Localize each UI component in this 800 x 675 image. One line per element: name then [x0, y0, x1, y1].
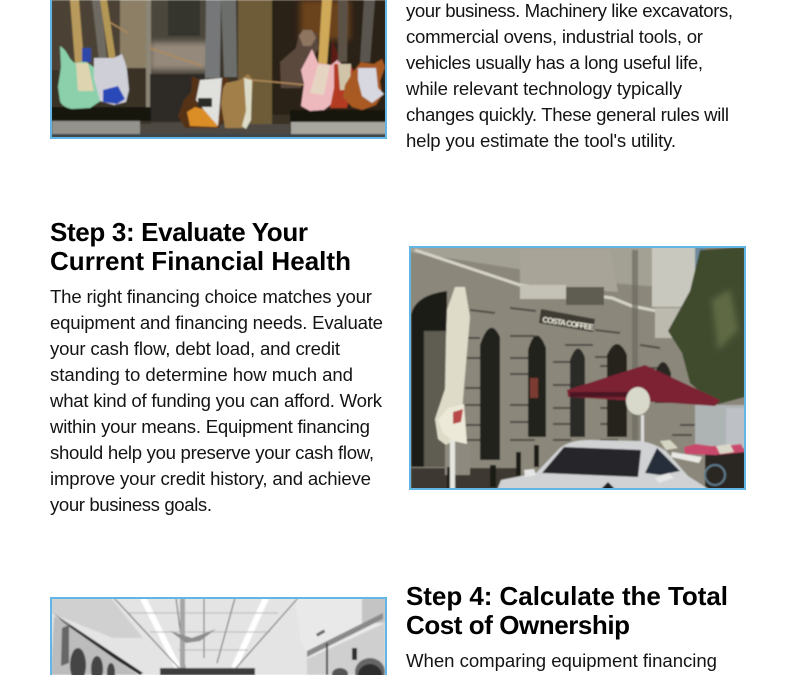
back wall [160, 668, 255, 675]
text: step 2 paragraph continuation: your business. Machinery like excavators, [406, 0, 733, 21]
text: step 4 paragraph start: When comparing equipment financing [406, 650, 717, 671]
tree [668, 247, 745, 405]
cafe photo border [410, 247, 745, 489]
flowers and bicycle [705, 452, 745, 490]
heading: step 3: Current Financial Health [50, 246, 351, 276]
text: step 2 paragraph continuation: vehicles usually has a long useful life, [406, 52, 703, 73]
photo: laundromat interior [51, 598, 386, 675]
left arch [411, 291, 447, 467]
heading: step 3: Step 3: Evaluate Your [50, 217, 308, 247]
left washers [54, 614, 134, 668]
text: step 3 paragraph: equipment and financing needs. Evaluate [50, 312, 383, 333]
right washers [307, 613, 383, 657]
guitar: white and blue [82, 0, 129, 105]
white car [497, 440, 710, 490]
text: step 2 paragraph continuation [405, 0, 733, 151]
text: step 3 paragraph: standing to determine how much and [50, 364, 353, 385]
text: step 3 paragraph [49, 286, 383, 515]
heading: step 3 [50, 217, 351, 276]
guitar photo border [51, 0, 386, 138]
guitar: mint [58, 0, 102, 109]
text: step 3 paragraph: The right financing choice matches your [50, 286, 372, 307]
arched windows [480, 328, 500, 460]
sign: Costa Coffee: COSTA COFFEE [542, 315, 595, 332]
sign backing [539, 309, 595, 332]
text: step 3 paragraph: within your means. Equipment financing [49, 416, 370, 437]
pavement [411, 468, 521, 490]
photo: cafe building with white car [410, 247, 745, 490]
heading: step 4 [406, 581, 728, 640]
text: step 3 paragraph: what kind of funding you can afford. Work [49, 390, 383, 411]
text: step 2 paragraph continuation: changes quickly. These general rules will [406, 104, 729, 125]
text: step 2 paragraph continuation: while relevant technology typically [405, 78, 683, 99]
columns [695, 405, 745, 447]
text: step 2 paragraph continuation: commercial ovens, industrial tools, or [406, 26, 703, 47]
guitar: red and cream [330, 0, 355, 108]
red parasol [567, 365, 720, 406]
heading: step 4: Cost of Ownership [406, 610, 630, 640]
text: step 3 paragraph: your business goals. [50, 494, 212, 515]
facade stone courses [465, 308, 696, 440]
guitar: sunburst bass [178, 0, 229, 128]
photo: guitars in a shop window [51, 0, 386, 138]
folded white umbrella [435, 287, 470, 445]
laundromat photo border [51, 598, 386, 675]
bollards [447, 445, 539, 488]
text: step 3 paragraph: improve your credit history, and achieve [50, 468, 371, 489]
guitar: right sunburst [343, 0, 385, 110]
guitar: pink [301, 0, 342, 111]
guitar: brown bass [221, 0, 253, 129]
ceiling lines [114, 598, 298, 675]
heading: step 4: Step 4: Calculate the Total [406, 581, 728, 611]
text: step 2 paragraph continuation: help you estimate the tool's utility. [406, 130, 676, 151]
text: step 3 paragraph: your cash flow, debt load, and credit [50, 338, 341, 359]
text: step 3 paragraph: should help you preserve your cash flow, [50, 442, 374, 463]
